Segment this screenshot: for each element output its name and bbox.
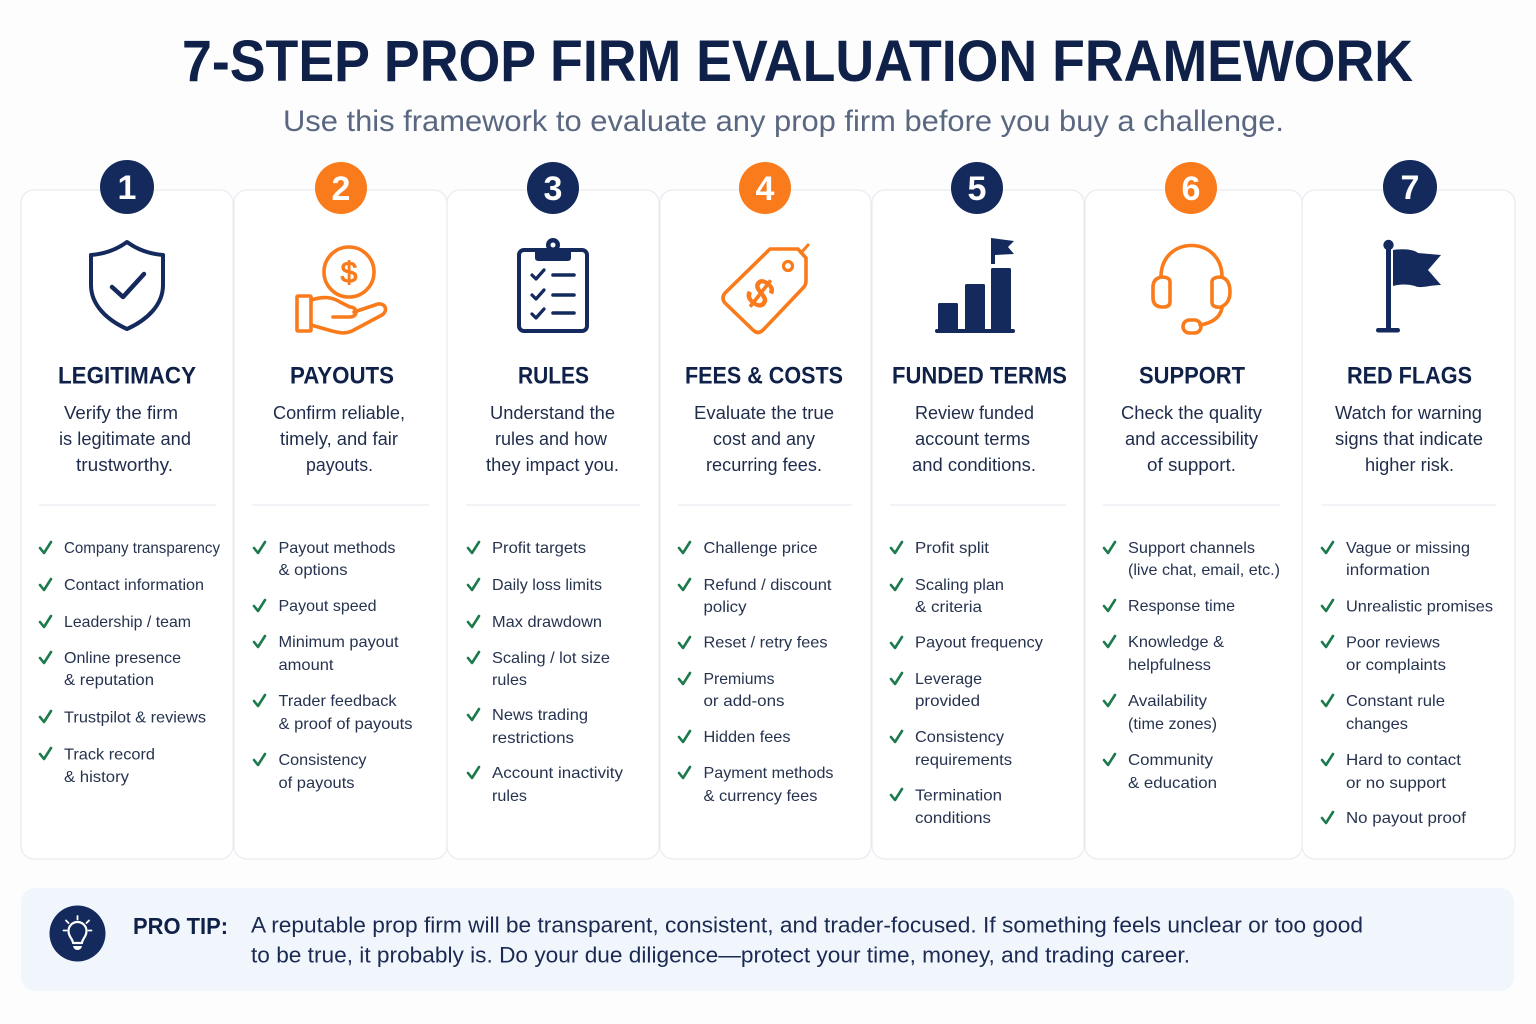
checklist: funded terms: provided xyxy=(915,693,980,710)
icon: shield with check xyxy=(91,242,163,329)
icon: light bulb xyxy=(50,906,106,962)
panel: step 5 funded terms xyxy=(872,162,1084,859)
checklist: red flags: or no support xyxy=(1346,775,1447,792)
checklist: funded terms: conditions xyxy=(915,810,991,827)
checklist: support: Support channels xyxy=(1128,540,1255,557)
checklist: red flags: Vague or missing xyxy=(1346,540,1470,557)
checklist: fees: Refund / discount xyxy=(704,577,832,594)
description: red flags xyxy=(1335,403,1483,475)
icon: waving flag xyxy=(1376,240,1441,332)
heading: red flags: RED FLAGS xyxy=(1347,362,1472,390)
description: red flags: signs that indicate xyxy=(1335,429,1483,449)
checklist: funded terms: & criteria xyxy=(915,599,982,616)
icon: clipboard checklist xyxy=(519,238,587,331)
description: funded terms: and conditions. xyxy=(912,455,1036,475)
checklist: funded terms: Leverage xyxy=(915,671,982,688)
checklist: funded terms: requirements xyxy=(915,752,1012,769)
badge: 6: 6 xyxy=(1182,170,1200,208)
checklist: rules: Daily loss limits xyxy=(492,577,602,594)
checklist: payouts: Minimum payout xyxy=(278,634,399,651)
checklist: legitimacy: Track record xyxy=(64,746,155,764)
title: 7-STEP PROP FIRM EVALUATION FRAMEWORK xyxy=(182,29,1413,94)
checklist: payouts: & proof of payouts xyxy=(278,716,412,733)
checklist: support: Response time xyxy=(1128,598,1235,615)
panel: step 6 support xyxy=(1085,162,1302,859)
badge: 2 xyxy=(315,162,367,214)
checklist: rules: Profit targets xyxy=(492,540,586,557)
checklist: legitimacy: Contact information xyxy=(64,577,204,594)
checklist: rules: Scaling / lot size xyxy=(492,650,610,667)
badge: 4 xyxy=(739,162,791,214)
icon: price tag with dollar xyxy=(723,245,808,332)
badge: 7: 7 xyxy=(1401,169,1419,207)
description: fees: Evaluate the true xyxy=(694,403,834,423)
checklist: fees: Reset / retry fees xyxy=(704,634,828,652)
checklist: legitimacy: Leadership / team xyxy=(64,614,191,631)
checklist: red flags: or complaints xyxy=(1346,657,1446,674)
checklist: red flags: Poor reviews xyxy=(1346,634,1440,652)
heading: rules: RULES xyxy=(518,362,589,390)
checklist: legitimacy: Online presence xyxy=(64,650,181,667)
checklist: funded terms xyxy=(891,540,1043,827)
checklist: fees: Premiums xyxy=(704,671,774,688)
panel: step 3 rules xyxy=(447,162,659,859)
checklist: fees: or add-ons xyxy=(704,693,784,710)
checklist: fees: Payment methods xyxy=(704,765,834,782)
heading: legitimacy: LEGITIMACY xyxy=(58,362,196,390)
description: payouts: Confirm reliable, xyxy=(273,403,405,423)
heading: support: SUPPORT xyxy=(1139,362,1245,390)
checklist: fees: policy xyxy=(704,599,746,616)
checklist: rules: News trading xyxy=(492,707,588,724)
checklist: fees: & currency fees xyxy=(704,788,818,805)
checklist: legitimacy: & history xyxy=(64,769,129,786)
icon: hand holding dollar coin xyxy=(297,247,385,333)
pro tip label: PRO TIP: xyxy=(133,913,228,939)
checklist: legitimacy: & reputation xyxy=(64,672,154,689)
checklist: payouts: Payout speed xyxy=(278,598,376,615)
checklist: fees: Challenge price xyxy=(704,540,818,557)
description: fees xyxy=(694,403,834,475)
description: funded terms: account terms xyxy=(915,429,1030,449)
icon: hand holding dollar coin: $ xyxy=(341,256,358,290)
description: rules: Understand the xyxy=(490,403,615,423)
checklist: red flags: Hard to contact xyxy=(1346,752,1462,769)
description: legitimacy: is legitimate and xyxy=(59,429,191,449)
description: red flags: Watch for warning xyxy=(1335,403,1482,423)
checklist: legitimacy: Trustpilot & reviews xyxy=(64,710,206,726)
badge: 4: 4 xyxy=(756,170,775,208)
checklist: legitimacy xyxy=(40,540,220,786)
panel: step 1 legitimacy xyxy=(21,160,233,859)
checklist: support: & education xyxy=(1128,775,1217,792)
checklist: fees: Hidden fees xyxy=(704,729,790,746)
checklist: funded terms: Payout frequency xyxy=(915,634,1043,652)
description: support: of support. xyxy=(1147,455,1236,475)
checklist: support: Knowledge & xyxy=(1128,634,1224,651)
panel: step 2 payouts xyxy=(234,162,447,859)
description: legitimacy xyxy=(59,403,191,475)
description: legitimacy: Verify the firm xyxy=(64,403,178,423)
description: legitimacy: trustworthy. xyxy=(76,455,173,475)
pro tip text: to be true, it probably is. Do your due diligence—protect your time, money, and trading career. xyxy=(251,942,1190,968)
subtitle: Use this framework to evaluate any prop firm before you buy a challenge. xyxy=(283,105,1284,138)
badge: 3 xyxy=(527,162,579,214)
checklist: rules: rules xyxy=(492,788,527,805)
description: rules: they impact you. xyxy=(486,455,619,475)
icon: price tag with dollar: $ xyxy=(738,270,782,318)
description: support: Check the quality xyxy=(1121,403,1262,423)
pro tip text: A reputable prop firm will be transparent, consistent, and trader-focused. If something feels unclear or too good xyxy=(251,912,1363,938)
description: red flags: higher risk. xyxy=(1365,455,1454,475)
description: funded terms xyxy=(912,403,1036,475)
checklist: payouts xyxy=(254,540,412,792)
checklist: red flags: Unrealistic promises xyxy=(1346,598,1493,616)
checklist: funded terms: Termination xyxy=(915,788,1002,804)
icon: headset xyxy=(1153,246,1230,333)
checklist: red flags: changes xyxy=(1346,716,1408,733)
checklist: payouts: of payouts xyxy=(278,775,354,792)
checklist: red flags xyxy=(1322,540,1493,827)
checklist: red flags: information xyxy=(1346,562,1430,579)
checklist: red flags: Constant rule xyxy=(1346,693,1445,710)
badge: 7 xyxy=(1383,160,1437,214)
checklist: rules xyxy=(468,540,623,805)
checklist: payouts: Payout methods xyxy=(278,540,396,557)
badge: 5 xyxy=(951,162,1003,214)
checklist: funded terms: Consistency xyxy=(915,729,1004,746)
checklist: payouts: Trader feedback xyxy=(278,693,398,710)
description: rules xyxy=(486,403,619,475)
description: payouts xyxy=(273,403,405,475)
badge: 6 xyxy=(1165,162,1217,214)
heading: payouts: PAYOUTS xyxy=(290,362,394,390)
checklist: rules: Account inactivity xyxy=(492,765,623,782)
checklist: funded terms: Profit split xyxy=(915,540,990,557)
checklist: rules: restrictions xyxy=(492,730,574,747)
description: support: and accessibility xyxy=(1125,429,1258,449)
checklist: legitimacy: Company transparency xyxy=(64,540,220,557)
heading: funded terms: FUNDED TERMS xyxy=(892,362,1067,390)
checklist: payouts: Consistency xyxy=(278,752,366,769)
checklist: funded terms: Scaling plan xyxy=(915,577,1004,594)
checklist: support xyxy=(1104,540,1280,792)
checklist: fees xyxy=(679,540,834,805)
panel: pro tip xyxy=(21,888,1514,991)
badge: 5: 5 xyxy=(968,170,986,208)
description: funded terms: Review funded xyxy=(915,403,1034,423)
checklist: support: Community xyxy=(1128,752,1213,769)
panel: step 7 red flags xyxy=(1302,160,1515,859)
description: payouts: payouts. xyxy=(306,455,373,475)
icon: rising bars with flag xyxy=(935,238,1015,333)
checklist: payouts: & options xyxy=(278,562,348,579)
heading: fees and costs: FEES & COSTS xyxy=(685,362,843,390)
checklist: support: helpfulness xyxy=(1128,657,1211,674)
description: support xyxy=(1121,403,1262,475)
checklist: rules: rules xyxy=(492,672,527,689)
badge: 2: 2 xyxy=(332,170,350,208)
badge: 1 xyxy=(100,160,154,214)
checklist: red flags: No payout proof xyxy=(1346,810,1467,827)
checklist: payouts: amount xyxy=(278,657,334,674)
checklist: rules: Max drawdown xyxy=(492,614,602,631)
checklist: support: (time zones) xyxy=(1128,716,1217,733)
badge: 1: 1 xyxy=(118,169,136,207)
checklist: support: (live chat, email, etc.) xyxy=(1128,562,1280,579)
description: rules: rules and how xyxy=(495,429,608,449)
checklist: support: Availability xyxy=(1128,693,1207,710)
description: fees: cost and any xyxy=(713,429,815,449)
panel: step 4 fees and costs xyxy=(660,162,871,859)
description: payouts: timely, and fair xyxy=(280,429,398,449)
pro tip text xyxy=(251,912,1363,968)
description: fees: recurring fees. xyxy=(706,455,822,475)
badge: 3: 3 xyxy=(544,170,562,208)
